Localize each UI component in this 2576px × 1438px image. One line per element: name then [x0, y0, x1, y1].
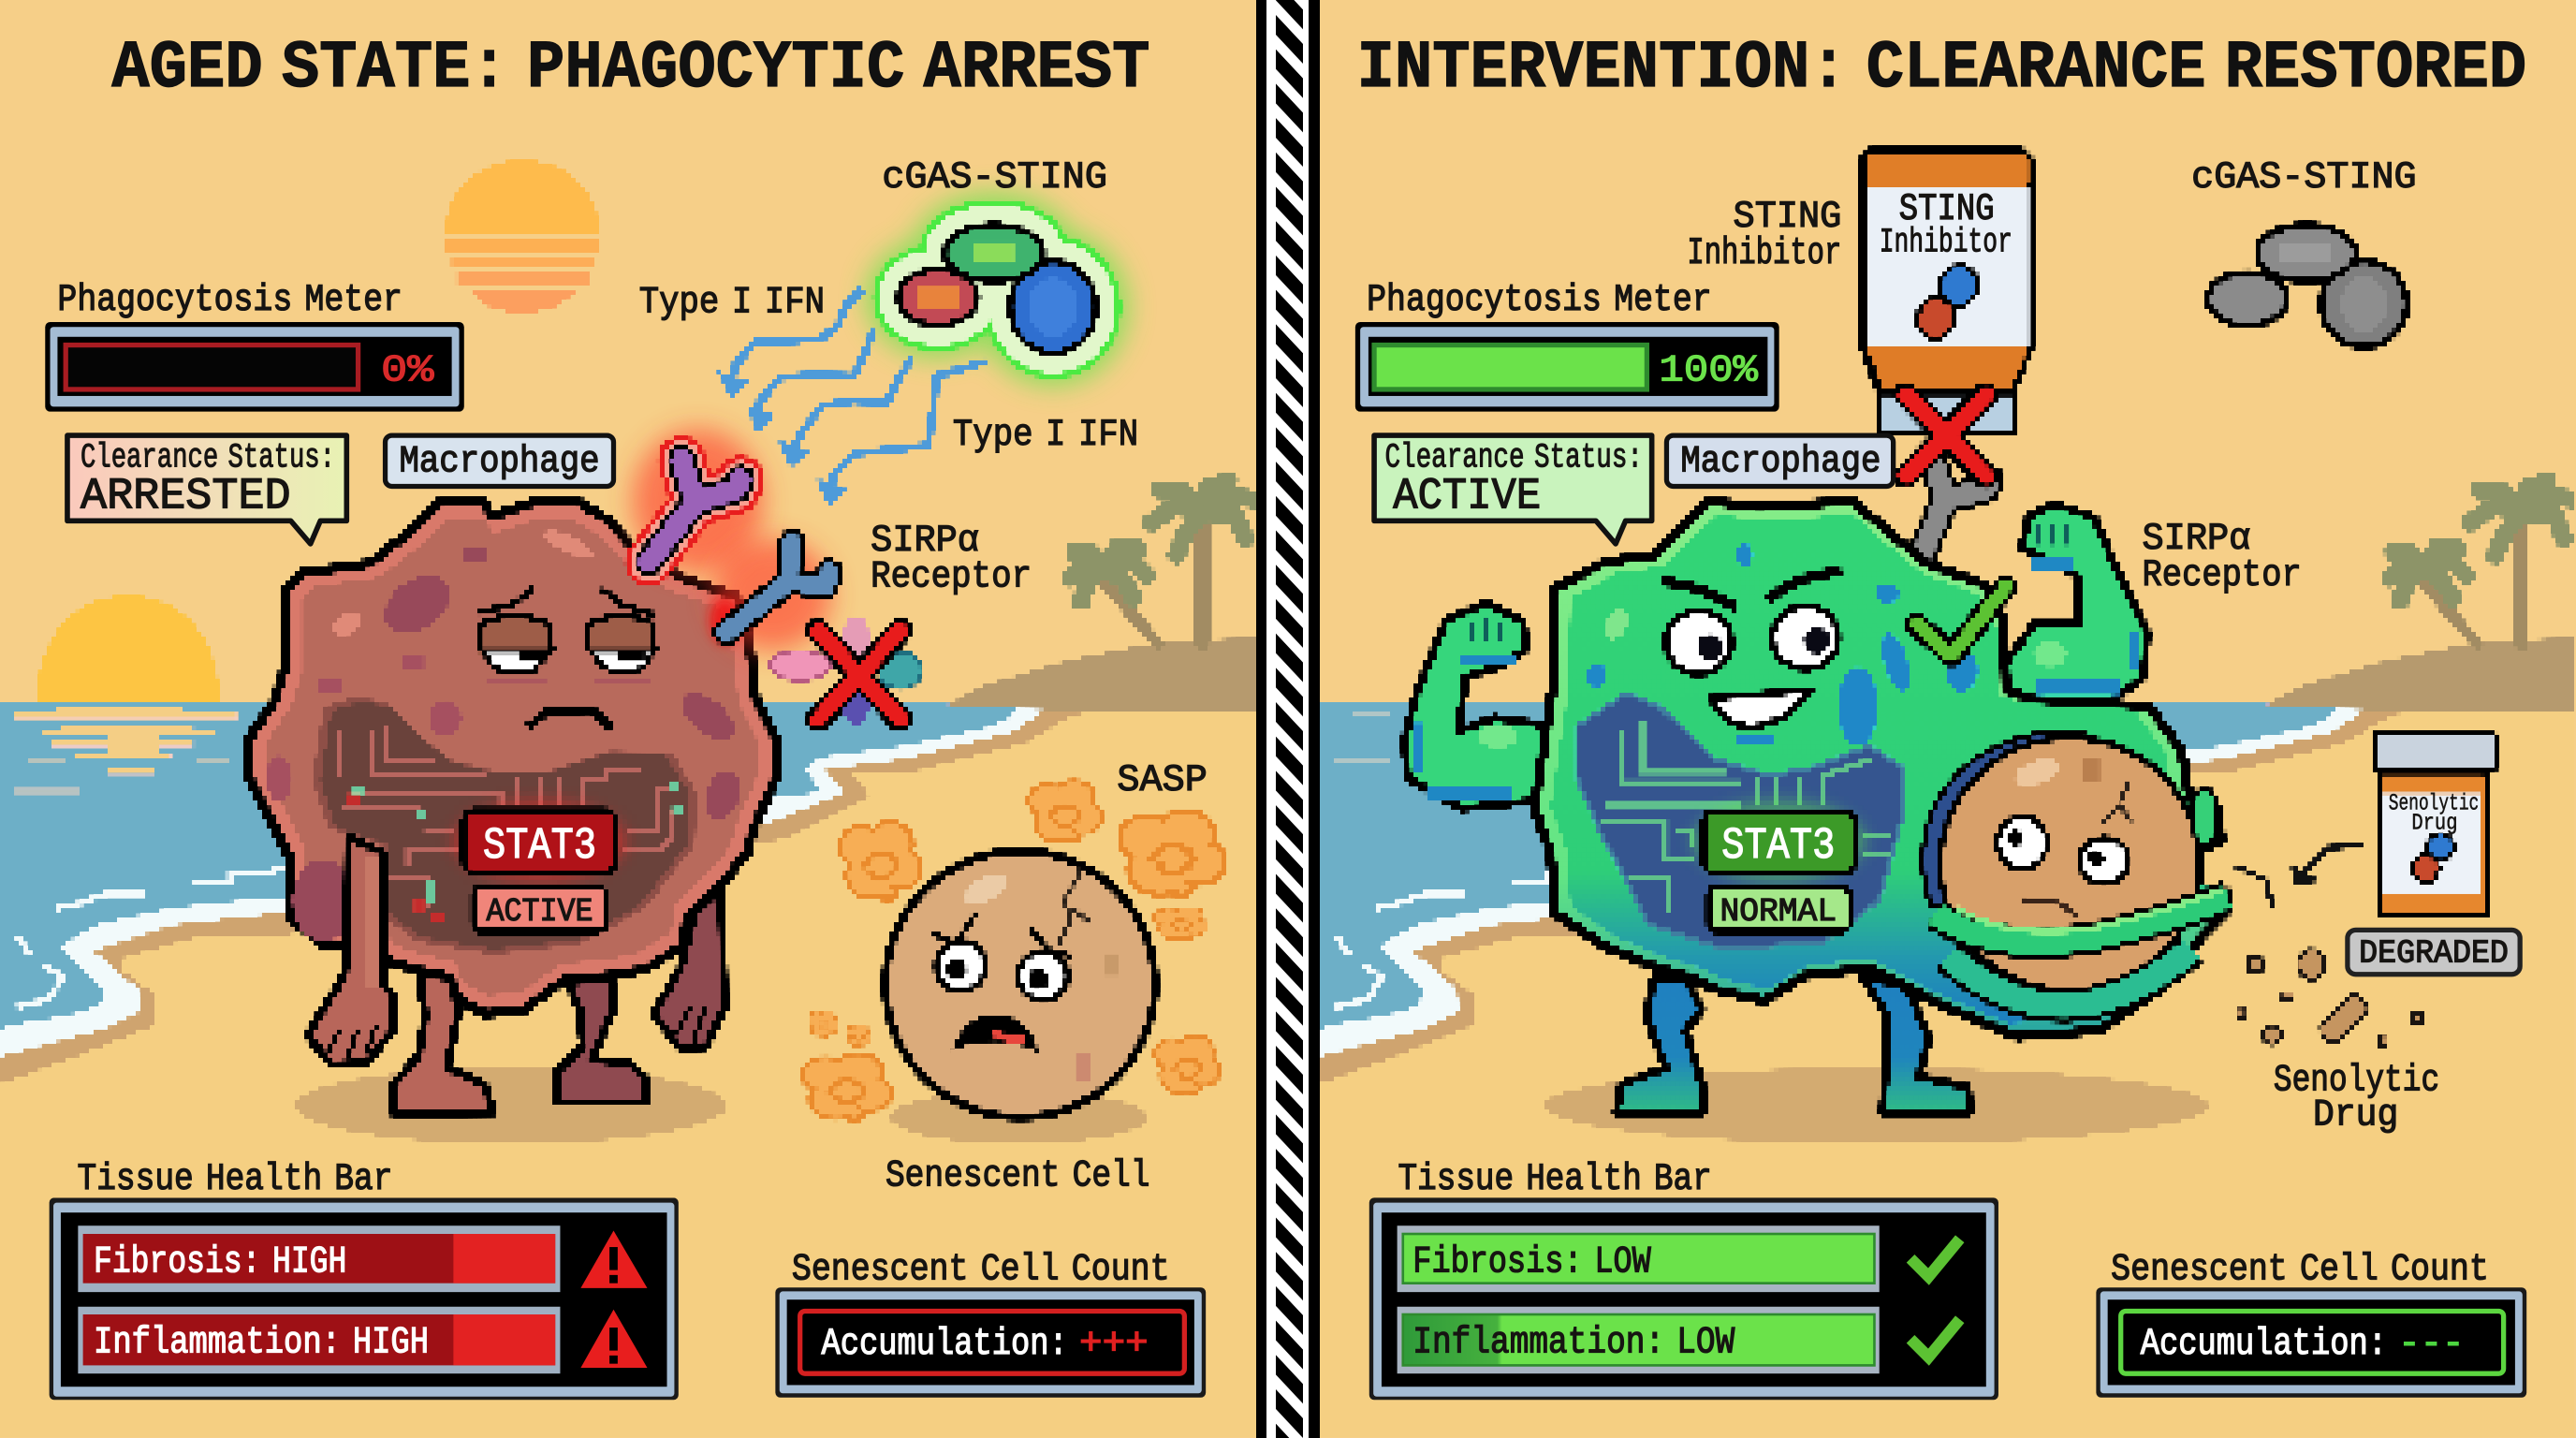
- panel: senescent cell count high: +++: [1079, 1323, 1149, 1365]
- icon: green check on receptor: [1917, 587, 2006, 655]
- arrows: Type I IFN signal: [718, 289, 986, 506]
- bar: inflammation low: Inflammation: LOW: [1412, 1321, 1735, 1364]
- STAT3 and ACTIVE labels: [483, 823, 596, 932]
- icon: STING inhibitor bottle: [1860, 148, 2034, 433]
- eyes: [936, 942, 986, 990]
- senolytic drug bottle: Senolytic: [2389, 791, 2479, 817]
- icon: check: [1910, 1319, 1960, 1357]
- labels: intervention annotations: [1687, 156, 2439, 1137]
- STAT3 and NORMAL labels: [1720, 823, 1837, 932]
- beach scene: [1319, 481, 2576, 1438]
- icon: degraded drug debris: [2237, 949, 2423, 1047]
- STAT3 and ACTIVE labels: STAT3: [483, 823, 596, 873]
- labels: pathway annotations: SIRPα: [871, 520, 979, 562]
- panel: senescent cell count low: ---: [2398, 1323, 2464, 1365]
- panel: senescent cell count low: [2096, 1248, 2526, 1398]
- title: INTERVENTION: CLEARANCE RESTORED: [1357, 32, 2526, 108]
- Phagocytosis meter: 100%: [1355, 322, 1779, 412]
- label: Phagocytosis Meter: Phagocytosis Meter: [1367, 278, 1712, 321]
- callout: clearance status arrested: ARRESTED: [80, 473, 291, 522]
- macrophage character, healthy, engulfing cell: [1405, 501, 2230, 1112]
- labels: intervention annotations: STING: [1734, 196, 1841, 238]
- icon: warning triangle: [580, 1230, 647, 1288]
- panel: senescent cell count high: [775, 1248, 1206, 1398]
- icon: STING inhibitor bottle: STING: [1899, 188, 1995, 230]
- icon: red glow on receptors: [633, 429, 831, 651]
- labels: intervention annotations: SIRPα: [2143, 518, 2251, 560]
- label: DEGRADED: DEGRADED: [2359, 935, 2509, 974]
- icon: cGAS-STING complex inactive: [2208, 225, 2407, 346]
- title: AGED STATE: PHAGOCYTIC ARREST: [111, 32, 1149, 108]
- bar: inflammation high: [78, 1307, 560, 1373]
- bar: inflammation low: [1398, 1307, 1880, 1373]
- Phagocytosis meter: 0%: [45, 322, 464, 412]
- macrophage face: determined: [1662, 572, 1841, 727]
- labels: intervention annotations: Senolytic: [2274, 1059, 2439, 1102]
- beach scene with suns: [0, 159, 1256, 1082]
- macrophage character, aged: [250, 501, 775, 1114]
- bar: fibrosis high: Fibrosis: HIGH: [94, 1240, 346, 1284]
- STAT3 and NORMAL labels: NORMAL: [1720, 894, 1837, 932]
- icon: check: [1910, 1239, 1960, 1277]
- labels: intervention annotations: cGAS-STING: [2191, 156, 2417, 198]
- macrophage face: sad tired: [476, 588, 653, 727]
- labels: intervention annotations: Receptor: [2143, 553, 2302, 596]
- SASP clouds: [804, 782, 1223, 1119]
- bar: fibrosis high: [78, 1225, 560, 1292]
- divider edge cover: [1309, 0, 1320, 1438]
- icon: warning triangle: [580, 1310, 647, 1368]
- panel: intervention: [1309, 0, 2576, 1438]
- labels: pathway annotations: Type I IFN: [639, 281, 825, 324]
- icon: red X over bottle nozzle: [1906, 394, 1986, 477]
- labels: pathway annotations: Senescent Cell: [886, 1154, 1149, 1197]
- Phagocytosis meter: 100%: 100%: [1660, 349, 1758, 392]
- chest circuit panel: [1577, 694, 1904, 949]
- bar: inflammation high: Inflammation: HIGH: [94, 1321, 429, 1364]
- arrow: drug to degraded fragments: [2236, 844, 2364, 909]
- mouth: [956, 1017, 1035, 1049]
- senescent cell with SASP clouds: [804, 782, 1223, 1119]
- labels: pathway annotations: Type I IFN: [953, 414, 1138, 456]
- label: Macrophage: Macrophage: [1680, 440, 1881, 483]
- panel: aged state: [0, 32, 1257, 1438]
- icon: grey receptor, inhibited: [1921, 466, 1989, 559]
- engulfed senescent cell: [1923, 731, 2228, 1005]
- callout: clearance status arrested: Clearance Status:: [80, 440, 335, 478]
- divider: [1256, 0, 1320, 1438]
- panel: senescent cell count low: Senescent Cell Count: [2111, 1248, 2489, 1291]
- label: Tissue Health Bar: Tissue Health Bar: [77, 1158, 392, 1200]
- Phagocytosis meter: 0%: 0%: [381, 349, 434, 392]
- label: Macrophage: Macrophage: [399, 440, 600, 483]
- panel: senescent cell count high: Senescent Cell Count: [792, 1248, 1170, 1291]
- senolytic drug bottle: Drug: [2411, 811, 2457, 837]
- labels: pathway annotations: cGAS-STING: [882, 156, 1107, 198]
- labels: pathway annotations: SASP: [1117, 759, 1208, 801]
- icon: cGAS-STING complex glowing: [899, 225, 1096, 353]
- ground shadows: [296, 1068, 1147, 1143]
- callout: clearance status active: Clearance Status:: [1384, 440, 1643, 478]
- panel: tissue health high: [50, 1197, 679, 1400]
- ground shadow: [1544, 1068, 2208, 1143]
- label: Phagocytosis Meter: Phagocytosis Meter: [57, 278, 402, 321]
- labels: intervention annotations: Inhibitor: [1687, 231, 1841, 274]
- macrophage body and arms: [1405, 501, 2230, 1112]
- label: Tissue Health Bar: Tissue Health Bar: [1398, 1158, 1712, 1200]
- bar: fibrosis low: Fibrosis: LOW: [1412, 1240, 1651, 1284]
- STAT3 and ACTIVE labels: ACTIVE: [486, 894, 593, 932]
- icon: SIRP alpha receptors, active: [649, 460, 829, 633]
- labels: pathway annotations: [639, 156, 1208, 1197]
- panel: senescent cell count high: Accumulation:: [821, 1323, 1068, 1365]
- panel: tissue health low: [1369, 1197, 1998, 1400]
- callout: clearance status arrested: [67, 435, 346, 544]
- panel: senescent cell count low: Accumulation:: [2141, 1323, 2387, 1365]
- icon: STING inhibitor bottle: Inhibitor: [1880, 225, 2012, 263]
- labels: pathway annotations: Receptor: [871, 555, 1032, 598]
- cell body: [886, 851, 1155, 1117]
- STAT3 and NORMAL labels: STAT3: [1721, 823, 1835, 873]
- bar: fibrosis low: [1398, 1225, 1880, 1292]
- labels: intervention annotations: Drug: [2313, 1093, 2398, 1137]
- icon: blocked ligand with red X: [770, 616, 922, 725]
- callout: clearance status active: [1374, 435, 1652, 544]
- callout: clearance status active: ACTIVE: [1393, 473, 1541, 522]
- macrophage body: [250, 501, 775, 1114]
- senolytic drug bottle: [2374, 733, 2496, 916]
